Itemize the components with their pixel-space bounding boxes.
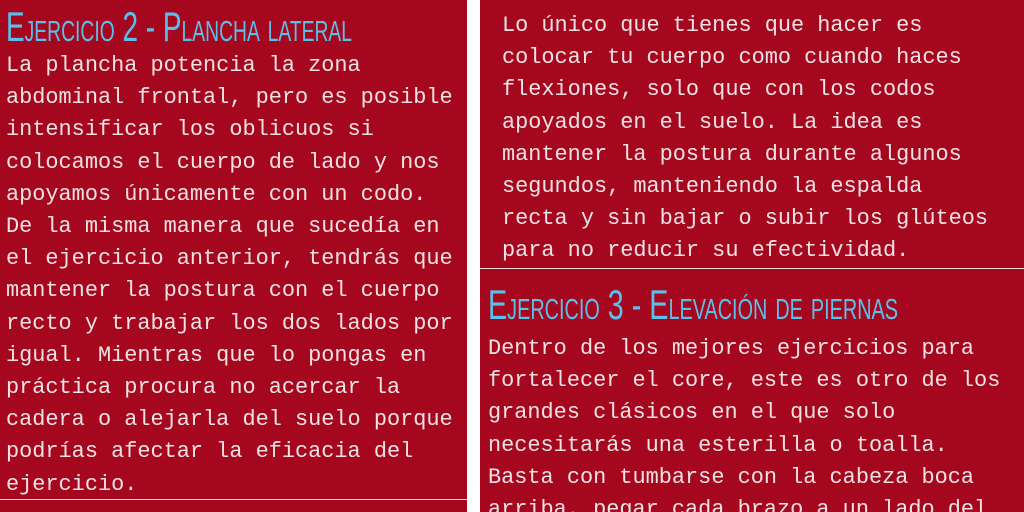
panel: left: [0, 0, 467, 512]
text block: plancha continuation: Lo único que tienes que hacer es colocar tu cuerpo como cuando haces flexiones, solo que con los codos apoyados en el suelo. La idea es mantener la postura durante algunos segundos, manteniendo la espalda recta y sin bajar o subir los glúteos para no reducir su efectividad.: [502, 13, 988, 263]
panel: right: [480, 0, 1024, 512]
text block: ejercicio 2 description: La plancha potencia la zona abdominal frontal, pero es posible intensificar los oblicuos si colocamos el cuerpo de lado y nos apoyamos únicamente con un codo. De la misma manera que sucedía en el ejercicio anterior, tendrás que mantener la postura con el cuerpo recto y trabajar los dos lados por igual. Mientras que lo pongas en práctica procura no acercar la cadera o alejarla del suelo porque podrías afectar la eficacia del ejercicio.: [6, 53, 453, 497]
